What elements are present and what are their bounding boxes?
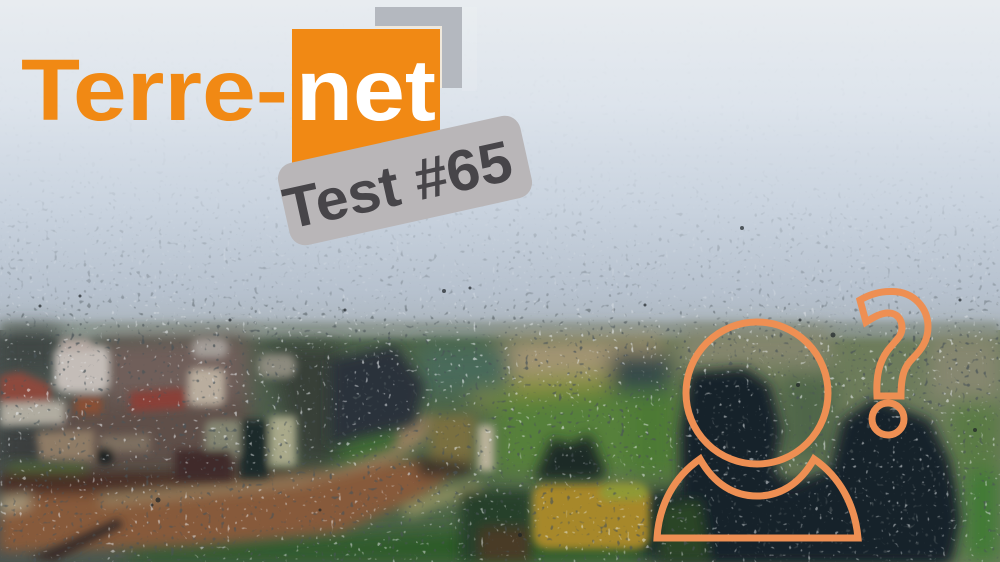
grass band and soil bbox=[8, 462, 85, 478]
badge: Test #65: Test #65 bbox=[278, 128, 518, 242]
logo: grey corner square bbox=[375, 7, 477, 91]
logo: orange square bbox=[292, 29, 440, 164]
diagonal post bbox=[30, 518, 124, 562]
logo: wordmark Terre-net: net bbox=[296, 42, 436, 139]
logo: wordmark Terre-net bbox=[21, 42, 436, 139]
dark trees bbox=[330, 345, 960, 562]
large water droplets bbox=[38, 226, 977, 537]
yellow field bbox=[533, 483, 650, 549]
background: rainy sky bbox=[0, 0, 1000, 345]
far fields bbox=[495, 335, 665, 378]
road bbox=[0, 460, 455, 552]
background: blurred countryside landscape bbox=[0, 181, 1000, 562]
icon: question mark outline bbox=[860, 291, 928, 435]
village roofs and walls bbox=[0, 372, 52, 405]
logo: wordmark Terre-net: Terre- bbox=[21, 42, 288, 139]
icon: person outline bbox=[657, 322, 858, 538]
droplet texture bbox=[0, 181, 1000, 562]
